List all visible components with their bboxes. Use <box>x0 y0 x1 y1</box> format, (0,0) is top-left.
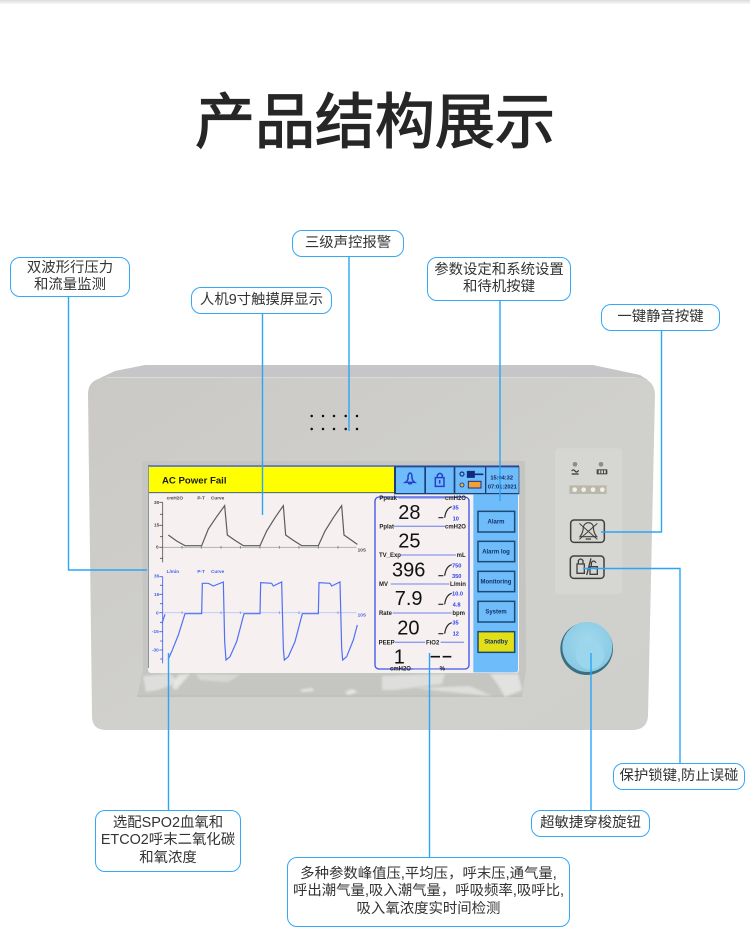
parameter panel: 35 <box>452 506 459 512</box>
flow waveform: L/min <box>167 569 179 574</box>
callout: mute key <box>601 304 720 331</box>
parameter panel: 25 <box>398 531 420 553</box>
menu buttons <box>473 494 518 672</box>
flow waveform: -30 <box>152 648 159 653</box>
callout: settings keys: 参数设定和系统设置 <box>434 262 564 278</box>
parameter panel: FiO2 <box>426 640 440 646</box>
callout: optional sensors: ETCO2呼末二氧化碳 <box>101 832 235 848</box>
callout: parameters <box>287 857 570 927</box>
flow waveform <box>152 569 366 663</box>
callout: knob: 超敏捷穿梭旋钮 <box>540 815 641 831</box>
side control panel <box>555 448 622 675</box>
parameter panel: 7.9 <box>395 588 423 610</box>
parameter panel: 4.8 <box>453 603 461 609</box>
parameter panel: TV_Exp <box>379 553 401 559</box>
flow waveform: 10S <box>358 612 366 617</box>
title: 产品结构展示 <box>195 89 555 156</box>
callout: dual waveform: 和流量监测 <box>34 277 106 293</box>
callout: lock key: 保护锁键,防止误碰 <box>619 768 739 784</box>
flow waveform: -15 <box>152 629 159 634</box>
menu buttons: Alarm <box>488 520 504 526</box>
callout: dual waveform: 双波形行压力 <box>27 260 113 276</box>
pressure waveform: P-T <box>197 496 205 501</box>
parameter panel <box>375 496 469 673</box>
top status buttons: 07:01:2021 <box>488 485 517 491</box>
speaker holes <box>310 414 359 431</box>
parameter panel: 396 <box>392 559 425 581</box>
callout: lock key <box>613 763 745 790</box>
parameter panel: Rate <box>379 611 393 617</box>
knob <box>560 622 613 675</box>
top band <box>0 0 750 4</box>
indicators <box>569 462 607 494</box>
parameter panel: cmH2O <box>445 524 466 530</box>
pressure waveform: Curve <box>211 496 225 501</box>
menu buttons: Alarm log <box>482 549 510 555</box>
top status buttons <box>394 466 519 494</box>
flow waveform: P-T <box>197 569 205 574</box>
pressure waveform <box>154 496 366 562</box>
callout: parameters: 多种参数峰值压,平均压，呼末压,通气量, <box>300 866 557 882</box>
pressure waveform: 0 <box>156 545 159 550</box>
parameter panel: 20 <box>397 617 419 639</box>
callout: alarm <box>292 230 404 257</box>
pressure waveform: 30 <box>154 500 160 505</box>
pressure waveform: 10S <box>358 547 366 552</box>
callout: touchscreen <box>191 287 332 314</box>
callout: mute key: 一键静音按键 <box>617 309 704 325</box>
parameter panel: bpm <box>452 611 465 617</box>
parameter panel: 10 <box>453 517 459 523</box>
pressure waveform: cmH2O <box>167 496 183 501</box>
flow waveform: 15 <box>154 592 160 597</box>
parameter panel: cmH2O <box>390 667 411 673</box>
alarm bar <box>149 467 394 493</box>
parameter panel: cmH2O <box>445 496 466 502</box>
callout: settings keys: 和待机按键 <box>463 279 535 295</box>
parameter panel: MV <box>379 582 388 588</box>
device body <box>88 365 655 730</box>
menu buttons: Monitoring <box>481 579 512 585</box>
callout: touchscreen: 人机9寸触摸屏显示 <box>200 292 323 308</box>
menu buttons: System <box>485 609 507 615</box>
callout: optional sensors: 选配SPO2血氧和 <box>113 815 223 831</box>
parameter panel: 28 <box>398 502 420 524</box>
parameter panel: 10.0 <box>452 592 463 598</box>
parameter panel: 750 <box>452 563 461 569</box>
parameter panel: % <box>440 667 446 673</box>
callout: parameters: 呼出潮气量,吸入潮气量，呼吸频率,吸呼比, <box>293 883 564 899</box>
top status buttons: 15:04:32 <box>490 475 513 481</box>
icon: lock button <box>570 556 604 578</box>
alarm bar: AC Power Fail <box>162 476 227 486</box>
menu buttons: Standby <box>484 640 508 646</box>
callout: dual waveform <box>10 257 130 297</box>
parameter panel: Pplat <box>379 524 394 530</box>
parameter panel: L/min <box>450 582 466 588</box>
callout: optional sensors: 和氧浓度 <box>139 850 197 866</box>
callout: knob <box>531 810 650 837</box>
callout: optional sensors <box>95 810 241 872</box>
pressure waveform: 15 <box>154 523 160 528</box>
parameter panel: PEEP <box>379 640 395 646</box>
flow waveform: 30 <box>154 574 160 579</box>
flow waveform: 0 <box>156 610 159 615</box>
parameter panel: mL <box>457 553 466 559</box>
callout: parameters: 吸入氧浓度实时间检测 <box>357 901 500 917</box>
parameter panel: 350 <box>452 574 461 580</box>
icon: mute button <box>571 520 604 542</box>
screen <box>148 465 519 673</box>
protective film around screen <box>137 461 526 697</box>
parameter panel: 35 <box>452 621 459 627</box>
flow waveform: Curve <box>211 569 225 574</box>
parameter panel: 12 <box>453 632 459 638</box>
parameter panel: Ppeak <box>379 496 398 502</box>
parameter panel: 1 <box>394 646 405 668</box>
callout: alarm: 三级声控报警 <box>305 235 391 251</box>
callout: settings keys <box>427 257 571 301</box>
